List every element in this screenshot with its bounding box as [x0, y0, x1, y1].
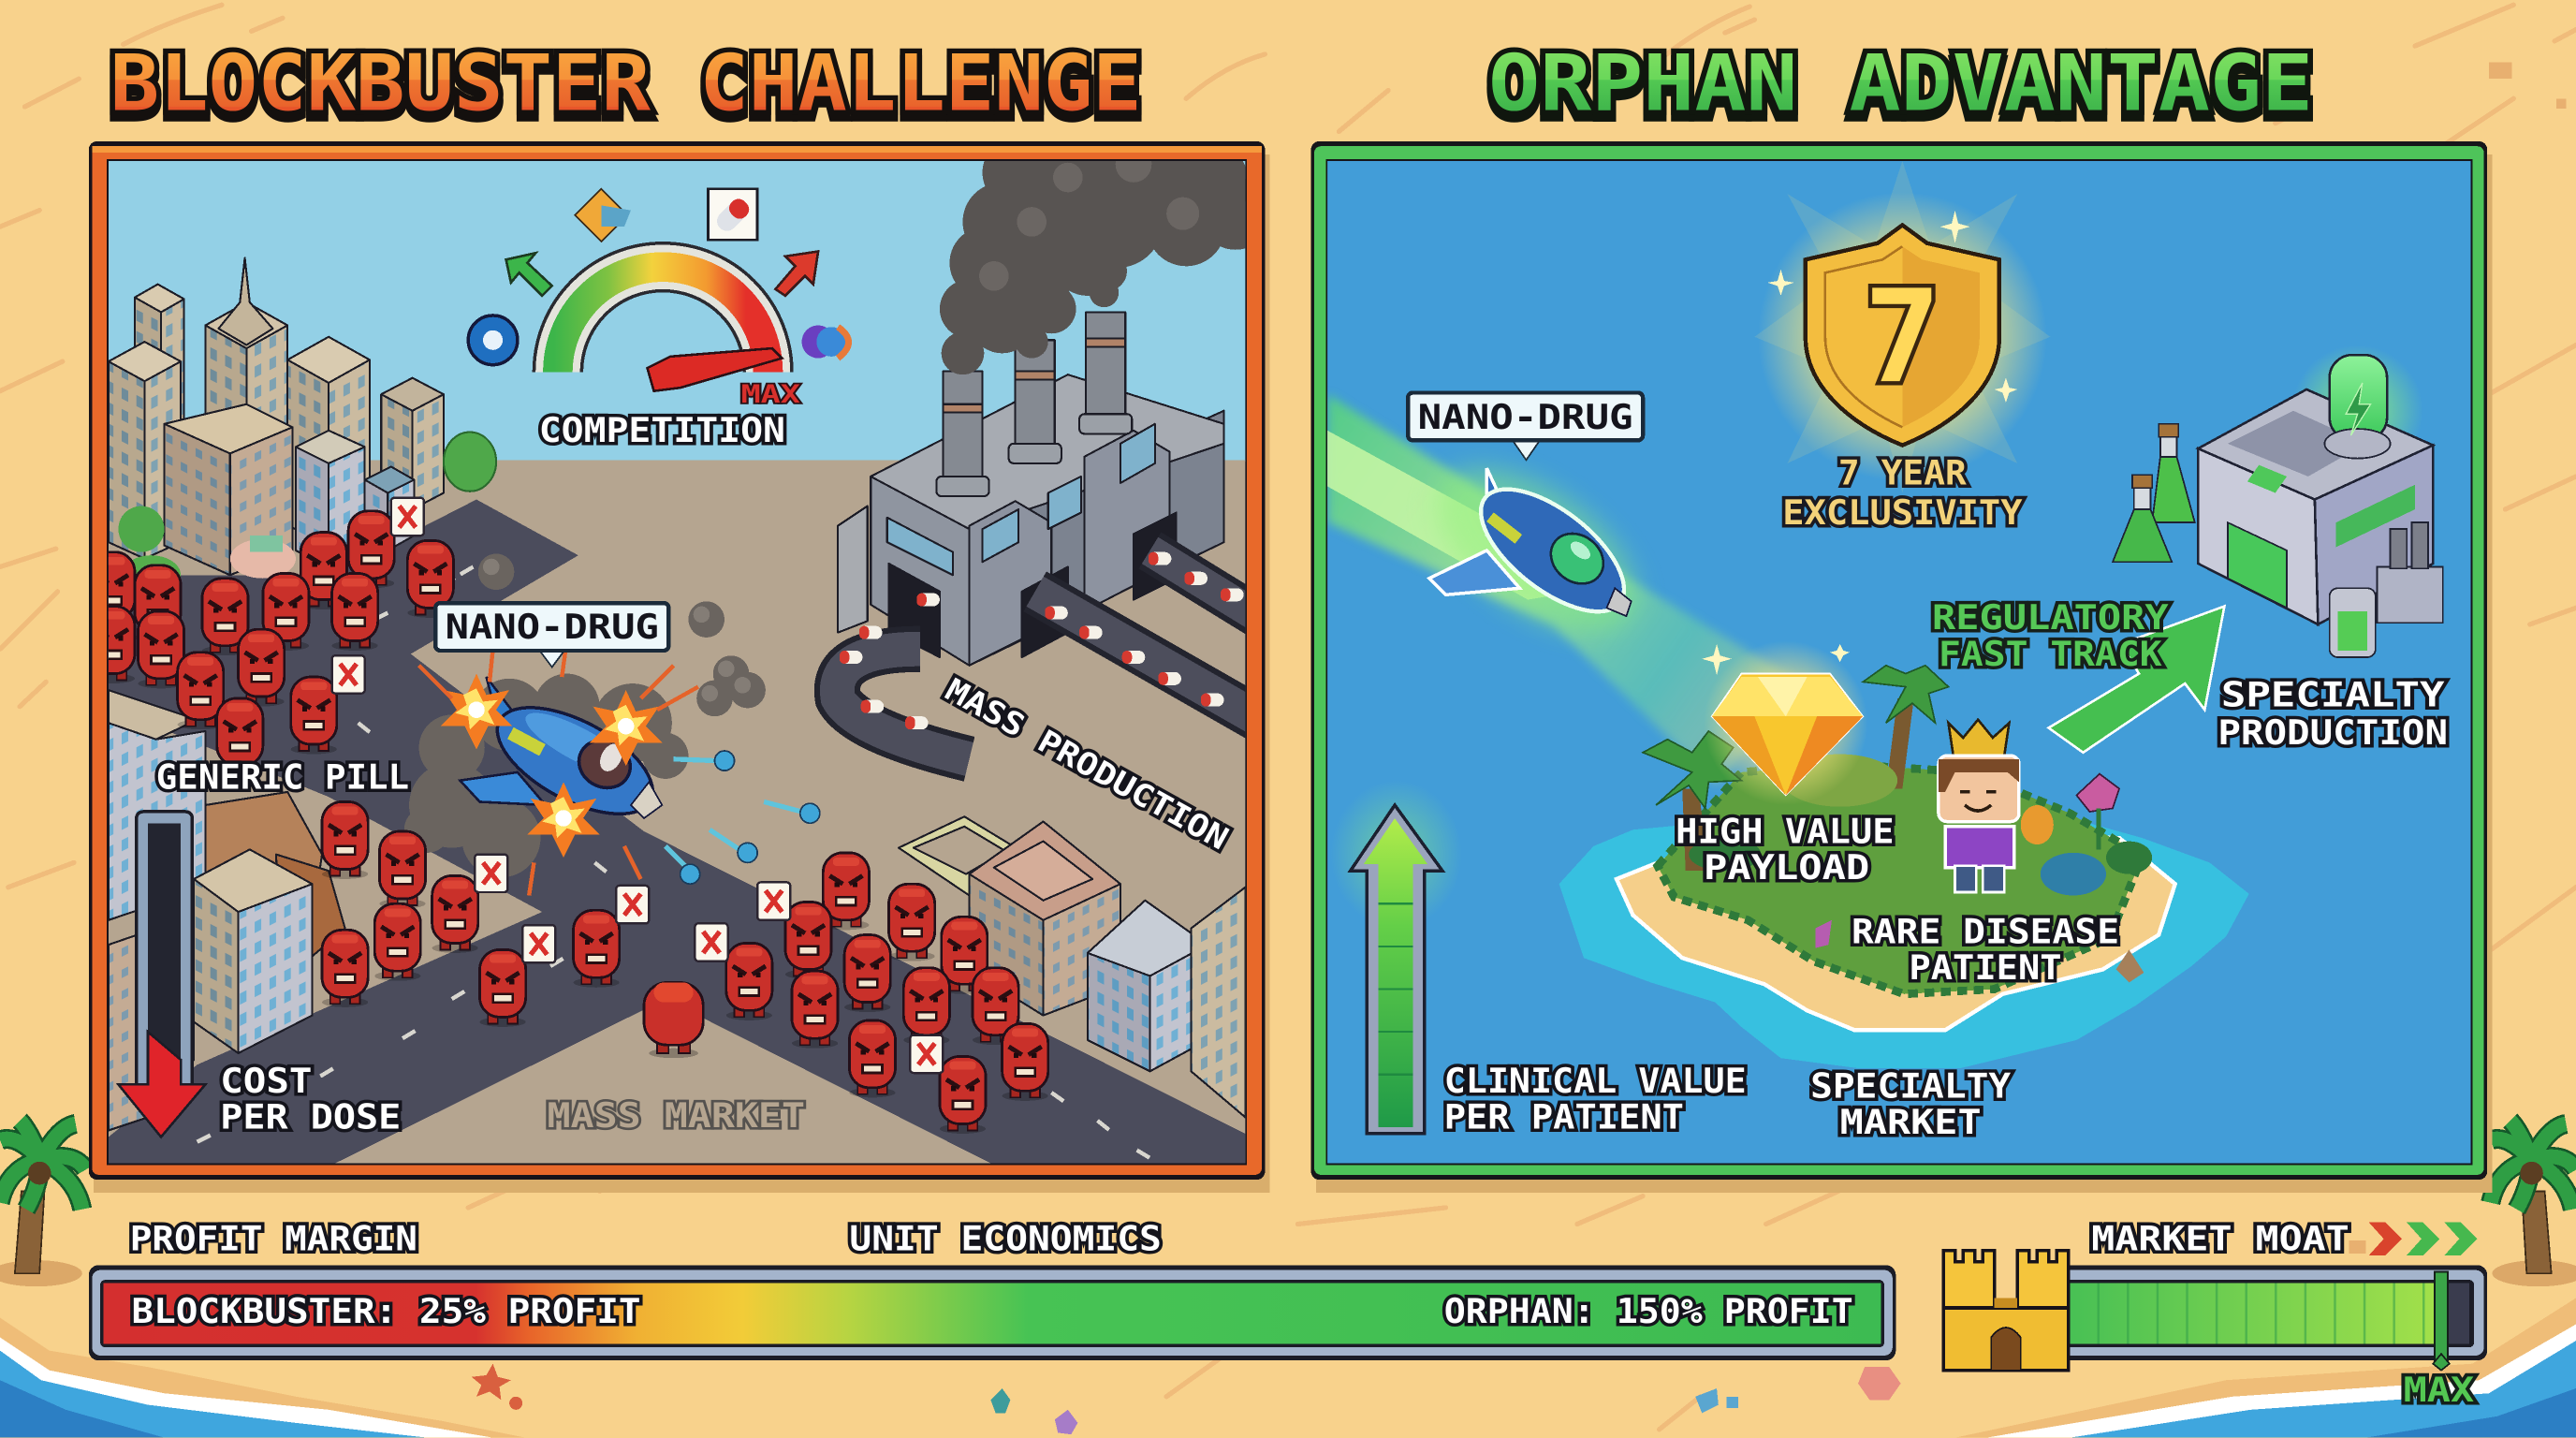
- road dashes: [198, 566, 1153, 1160]
- conveyor belts with capsules: [837, 550, 1265, 759]
- regulatory fast track arrow: [2049, 607, 2224, 753]
- blue projectiles: [666, 751, 820, 884]
- castle icon: [1943, 1251, 2069, 1371]
- beach critters: [472, 1364, 1901, 1434]
- generic pill label: GENERIC PILL: [156, 756, 409, 797]
- generic pill enemies: [89, 498, 1048, 1134]
- shield numeral: 7: [1864, 263, 1941, 412]
- smokestacks: [936, 312, 1132, 496]
- cost per dose label: COST: [220, 1061, 313, 1101]
- high value payload label: PAYLOAD: [1704, 847, 1869, 888]
- island sand: [1617, 829, 2175, 1030]
- specialty market label: SPECIALTY: [1810, 1065, 2012, 1106]
- moat chevrons: [2369, 1223, 2478, 1255]
- shallow water: [1559, 814, 2249, 1068]
- sparkles: [1702, 211, 2017, 675]
- competitor icons: [468, 189, 849, 365]
- skyline buildings: [109, 258, 496, 575]
- moat bar: [2037, 1265, 2487, 1371]
- nano-drug label: [1408, 392, 1643, 460]
- nano-drug label: [435, 603, 668, 668]
- unit economics bar: [89, 1265, 1895, 1360]
- rare disease patient label: RARE DISEASE: [1852, 911, 2119, 951]
- seven year exclusivity label: [1782, 453, 2023, 533]
- regulatory fast track label: [1932, 597, 2170, 674]
- rare disease patient character: [1939, 720, 2019, 892]
- nano-drug label: NANO-DRUG: [1418, 397, 1633, 437]
- market moat label: MARKET MOAT: [2091, 1219, 2349, 1259]
- competition label: COMPETITION: [539, 410, 785, 450]
- palm tree left: [0, 1121, 85, 1286]
- orphan profit text: ORPHAN: 150% PROFIT: [1444, 1291, 1853, 1331]
- island grass: [1658, 764, 2143, 994]
- ground: [109, 460, 1245, 1167]
- high value payload label: [1676, 811, 1895, 888]
- panel: blockbuster challenge: [89, 135, 1271, 1193]
- water: bottom right shore: [1955, 1298, 2576, 1438]
- regulatory fast track label: REGULATORY: [1932, 597, 2170, 638]
- rare disease patient label: [1852, 911, 2119, 988]
- seven year shield: [1806, 225, 1999, 446]
- island flowers and rock: [1815, 774, 2152, 983]
- high value payload label: HIGH VALUE: [1676, 811, 1895, 851]
- specialty production label: PRODUCTION: [2217, 712, 2448, 753]
- moat max label: MAX: [2404, 1370, 2474, 1410]
- cost per dose label: PER DOSE: [220, 1097, 401, 1137]
- profit margin label: PROFIT MARGIN: [130, 1219, 417, 1259]
- competition gauge: [558, 267, 800, 409]
- seven year exclusivity label: EXCLUSIVITY: [1782, 492, 2023, 533]
- panel: orphan advantage: [1311, 141, 2492, 1193]
- specialty market label: MARKET: [1840, 1102, 1982, 1142]
- gauge arc: [558, 267, 768, 373]
- nano-drug label: NANO-DRUG: [446, 607, 659, 647]
- shield glow: [1754, 161, 2050, 493]
- gauge max label: MAX: [741, 381, 800, 409]
- lower right buildings: [899, 816, 1245, 1117]
- ocean: [1327, 161, 2471, 1164]
- high value gem: [1704, 640, 1868, 805]
- factory smoke: [940, 135, 1271, 374]
- palm tree right: [2491, 1121, 2576, 1286]
- regulatory fast track label: FAST TRACK: [1939, 634, 2163, 674]
- cost per dose label: [220, 1061, 401, 1137]
- explosions: [419, 640, 698, 895]
- nano-drug ship under fire: [460, 677, 669, 836]
- palm trees: [1643, 666, 1949, 871]
- specialty market label: [1810, 1065, 2012, 1142]
- green speed beam: [1327, 394, 1799, 785]
- sky: [109, 161, 1245, 462]
- mass market label: MASS MARKET: [547, 1095, 805, 1136]
- chemical flasks: [2113, 424, 2195, 562]
- specialty production label: SPECIALTY: [2221, 675, 2446, 715]
- title: blockbuster challenge: BLOCKBUSTER CHALLENGE: [110, 39, 1142, 129]
- specialty production facility: [2198, 345, 2443, 657]
- clinical value arrow: [1331, 781, 1462, 1134]
- clinical value per patient label: PER PATIENT: [1444, 1097, 1684, 1137]
- park bushes and plaza: [118, 506, 296, 594]
- lower left buildings: [109, 690, 345, 1130]
- seven year exclusivity label: 7 YEAR: [1838, 453, 1968, 493]
- nano-drug ship: [1408, 436, 1664, 665]
- cost per dose arrow: [118, 812, 205, 1137]
- clinical value per patient label: [1444, 1061, 1747, 1137]
- title: orphan advantage: ORPHAN ADVANTAGE: [1488, 39, 2313, 129]
- factory: [838, 374, 1224, 666]
- water: bottom left shore: [0, 1318, 526, 1438]
- unit economics label: UNIT ECONOMICS: [849, 1219, 1162, 1259]
- smoke puffs: [404, 553, 766, 877]
- clinical value per patient label: CLINICAL VALUE: [1444, 1061, 1747, 1101]
- blockbuster profit text: BLOCKBUSTER: 25% PROFIT: [131, 1291, 641, 1331]
- specialty production label: [2217, 675, 2448, 753]
- roads: [109, 500, 1245, 1167]
- mass production label: MASS PRODUCTION: [940, 671, 1235, 857]
- rare disease patient label: PATIENT: [1909, 947, 2062, 988]
